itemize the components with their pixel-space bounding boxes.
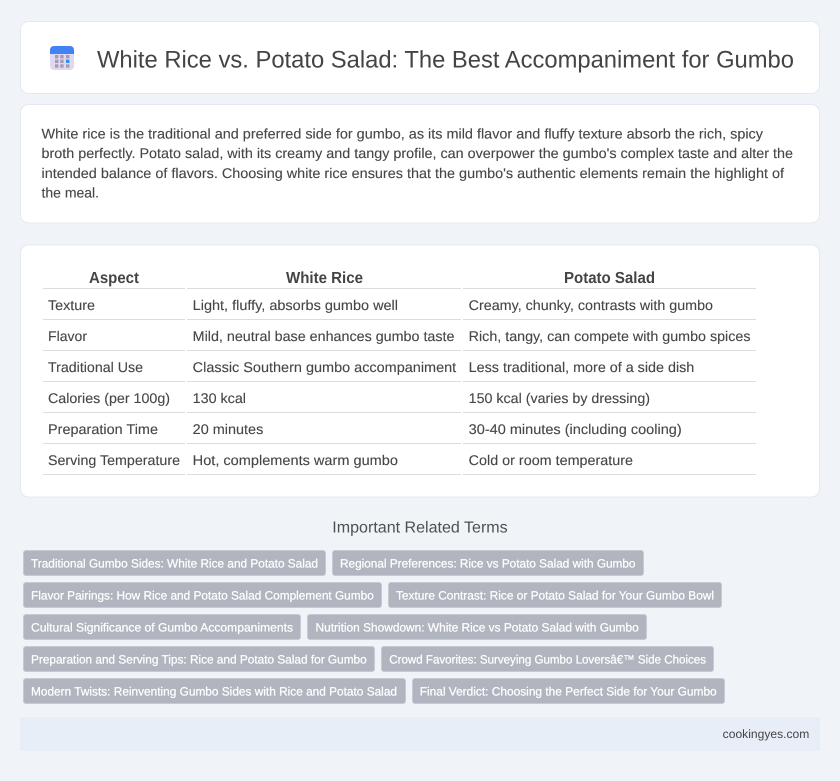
table header row: Aspect bbox=[89, 270, 140, 287]
row: calories: 150 kcal (varies by dressing) bbox=[469, 390, 650, 406]
tag bbox=[412, 678, 724, 704]
row: traditional use: Traditional Use bbox=[48, 359, 143, 375]
row: serving temperature: Cold or room temperature bbox=[469, 452, 633, 468]
row: calories bbox=[48, 390, 650, 406]
row: preparation time: 30-40 minutes (including cooling) bbox=[469, 421, 682, 437]
intro text: White rice is the traditional and preferred side for gumbo, as its mild flavor and fluffy texture absorb the rich, spicy bbox=[42, 126, 763, 142]
tag bbox=[388, 582, 722, 608]
row: traditional use bbox=[48, 359, 694, 375]
row: flavor: Rich, tangy, can compete with gumbo spices bbox=[469, 328, 750, 344]
tag: Regional Preferences: Rice vs Potato Salad with Gumbo bbox=[340, 556, 636, 570]
row: calories: 130 kcal bbox=[193, 390, 246, 406]
row: serving temperature: Hot, complements warm gumbo bbox=[193, 452, 398, 468]
title: White Rice vs. Potato Salad: The Best Accompaniment for Gumbo bbox=[97, 46, 794, 74]
footer bar bbox=[20, 717, 820, 751]
heading: important related terms: Important Related Terms bbox=[332, 520, 508, 537]
tag: Cultural Significance of Gumbo Accompaniments bbox=[31, 620, 293, 634]
panel: comparison table bbox=[20, 245, 820, 497]
panel: introduction paragraph bbox=[20, 104, 820, 223]
tag: Final Verdict: Choosing the Perfect Side for Your Gumbo bbox=[420, 684, 717, 698]
related terms tags bbox=[24, 550, 724, 704]
tag bbox=[24, 582, 382, 608]
tag bbox=[24, 614, 300, 640]
tag: Traditional Gumbo Sides: White Rice and Potato Salad bbox=[31, 556, 318, 570]
row: flavor: Flavor bbox=[48, 328, 87, 344]
row: preparation time: 20 minutes bbox=[193, 421, 263, 437]
intro text: broth perfectly. Potato salad, with its creamy and tangy profile, can overpower the gumbo's complex taste and alter the bbox=[42, 145, 793, 161]
tag: Modern Twists: Reinventing Gumbo Sides with Rice and Potato Salad bbox=[31, 684, 397, 698]
row: texture: Creamy, chunky, contrasts with gumbo bbox=[469, 297, 713, 313]
tag bbox=[24, 550, 326, 576]
tag bbox=[308, 614, 646, 640]
tag bbox=[24, 678, 406, 704]
tag: Texture Contrast: Rice or Potato Salad for Your Gumbo Bowl bbox=[396, 588, 714, 602]
row: traditional use: Classic Southern gumbo accompaniment bbox=[193, 359, 456, 375]
icon: calendar bbox=[50, 46, 74, 70]
table header row: White Rice bbox=[286, 270, 363, 287]
intro text bbox=[42, 126, 793, 200]
intro text: intended balance of flavors. Choosing white rice ensures that the gumbo's authentic elements remain the highlight of bbox=[42, 165, 784, 181]
row: serving temperature bbox=[48, 452, 633, 468]
row: serving temperature: Serving Temperature bbox=[48, 452, 180, 468]
intro text: the meal. bbox=[42, 184, 99, 200]
row: texture: Texture bbox=[48, 297, 95, 313]
row: flavor bbox=[48, 328, 750, 344]
tag: Preparation and Serving Tips: Rice and Potato Salad for Gumbo bbox=[31, 652, 367, 666]
tag: Crowd Favorites: Surveying Gumbo Loversâ€™ Side Choices bbox=[389, 652, 706, 666]
tag bbox=[24, 646, 374, 672]
row: flavor: Mild, neutral base enhances gumbo taste bbox=[193, 328, 455, 344]
row: texture bbox=[48, 297, 713, 313]
row: calories: Calories (per 100g) bbox=[48, 390, 170, 406]
row: preparation time bbox=[48, 421, 682, 437]
tag bbox=[332, 550, 644, 576]
table header row bbox=[89, 270, 655, 287]
footer source: cookingyes.com bbox=[723, 727, 809, 741]
tag: Nutrition Showdown: White Rice vs Potato Salad with Gumbo bbox=[316, 620, 639, 634]
row: texture: Light, fluffy, absorbs gumbo well bbox=[193, 297, 398, 313]
tag: Flavor Pairings: How Rice and Potato Salad Complement Gumbo bbox=[31, 588, 374, 602]
tag bbox=[382, 646, 714, 672]
row: preparation time: Preparation Time bbox=[48, 421, 158, 437]
table header row: Potato Salad bbox=[564, 270, 655, 287]
row: traditional use: Less traditional, more of a side dish bbox=[469, 359, 694, 375]
header panel bbox=[20, 22, 820, 94]
